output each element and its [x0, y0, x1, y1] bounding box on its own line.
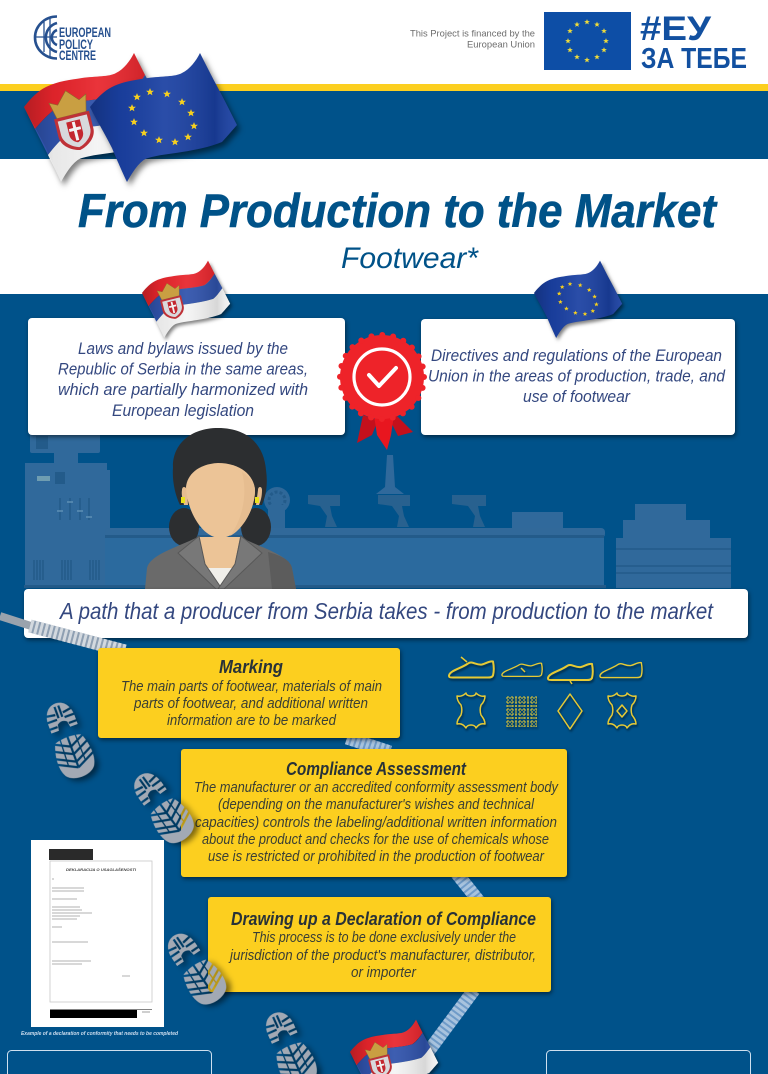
financing note: This Project is financed by the — [410, 28, 535, 40]
icons: materials — [457, 693, 636, 729]
title band: white — [0, 159, 768, 294]
step: Compliance Assessment: capacities) controls the labeling/additional written information — [195, 814, 557, 831]
panel: Serbian laws: which are partially harmonized with — [58, 380, 308, 399]
financing note: European Union — [467, 40, 535, 50]
document: declaration of conformity example — [31, 840, 164, 1027]
logo: European Policy Centre: CENTRE — [59, 48, 96, 63]
footprint 2 — [95, 736, 231, 880]
step: Compliance Assessment: use is restricted or prohibited in the production of footwear — [208, 848, 545, 865]
flag: Serbia small — [142, 261, 230, 338]
document: declaration of conformity example: DEKLARACIJA O USAGLAŠENOSTI — [66, 867, 137, 872]
subtitle: Footwear* — [341, 242, 479, 275]
logo: European Policy Centre — [35, 16, 111, 63]
step: Marking: Marking — [219, 657, 283, 677]
panel: bottom right outline — [546, 1050, 750, 1074]
EU flag logo — [544, 12, 631, 70]
panel: Serbian laws — [28, 318, 345, 435]
figure: woman producer — [145, 428, 296, 589]
step: Drawing up a Declaration of Compliance — [208, 897, 551, 992]
financing note — [410, 28, 535, 50]
yellow stripe — [0, 84, 768, 91]
step: Marking: information are to be marked — [167, 712, 337, 729]
step: Compliance Assessment: about the product and checks for the use of chemicals whose — [202, 831, 549, 848]
icon: red rosette with check mark — [340, 335, 424, 450]
logo: European Policy Centre: EUROPEAN — [59, 25, 111, 40]
panel: bottom left outline — [8, 1050, 212, 1074]
step: Compliance Assessment — [181, 749, 567, 877]
step: Compliance Assessment: The manufacturer or an accredited conformity assessment body — [194, 779, 559, 796]
factory background illustration — [24, 432, 731, 588]
panel: Serbian laws: Laws and bylaws issued by the — [78, 339, 288, 358]
step: Marking: The main parts of footwear, materials of main — [121, 678, 382, 695]
flag: EU large — [90, 53, 237, 182]
step: Compliance Assessment: (depending on the manufacturer's wishes and technical — [218, 796, 535, 813]
campaign hashtag: ЗА ТЕБЕ — [641, 43, 747, 75]
panel: EU directives: use of footwear — [523, 387, 631, 406]
panel: EU directives: Directives and regulations of the European — [431, 346, 722, 365]
campaign hashtag — [640, 10, 747, 75]
campaign hashtag: #ЕУ — [640, 10, 712, 48]
step: Drawing up a Declaration of Compliance: This process is to be done exclusively under the — [252, 929, 516, 946]
lace: segments — [0, 616, 482, 1052]
logo: European Policy Centre: POLICY — [59, 37, 93, 52]
title: From Production to the Market — [78, 184, 718, 237]
step: Drawing up a Declaration of Compliance: jurisdiction of the product's manufacturer, distributor, — [228, 947, 536, 964]
footprint 3 — [129, 897, 263, 1041]
footprint 4 — [229, 979, 351, 1074]
step: Compliance Assessment: Compliance Assessment — [286, 759, 467, 779]
header band: white — [0, 0, 768, 84]
icons: shoe parts — [449, 657, 642, 684]
panel: Serbian laws: European legislation — [112, 401, 254, 420]
panel: EU directives — [421, 319, 735, 435]
flag: Serbia large — [24, 53, 171, 182]
step: Drawing up a Declaration of Compliance: or importer — [351, 964, 417, 981]
caption: document: Example of a declaration of conformity that needs to be completed — [21, 1031, 179, 1037]
flag: EU small — [534, 261, 622, 338]
flag: Serbia bottom — [350, 1020, 438, 1074]
step: Drawing up a Declaration of Compliance: Drawing up a Declaration of Compliance — [231, 909, 536, 929]
footprint 1 — [11, 671, 127, 811]
panel: EU directives: Union in the areas of production, trade, and — [428, 366, 725, 386]
step: Marking: parts of footwear, and additional written — [133, 695, 368, 712]
panel: Serbian laws: Republic of Serbia in the same areas, — [58, 360, 308, 378]
banner: path heading — [24, 589, 748, 638]
step: Marking — [98, 648, 400, 738]
